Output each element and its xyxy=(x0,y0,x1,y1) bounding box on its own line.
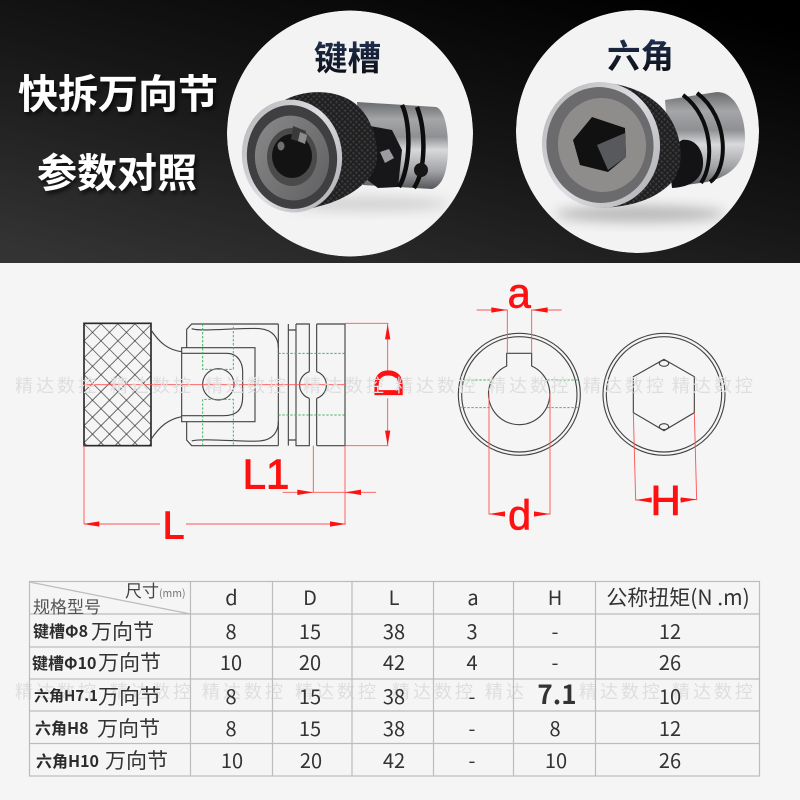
watermark row upper: 精达数控 xyxy=(303,372,387,398)
row: hex 10: - xyxy=(469,745,476,774)
watermark row upper: 精达数控 xyxy=(672,372,756,398)
table header: a xyxy=(467,582,479,611)
row: hex 8: 12 xyxy=(659,713,681,742)
row: hex 10: 10 xyxy=(221,745,243,774)
watermark row lower: 精达数控 xyxy=(15,678,99,704)
row: hex 8: - xyxy=(469,713,476,742)
yoke and body outlines xyxy=(151,324,345,446)
end view drawings xyxy=(458,270,725,538)
label L1: L1 xyxy=(243,450,289,497)
row: hex 7.1: 38 xyxy=(383,681,405,710)
table grid xyxy=(30,582,760,776)
subtitle: 参数对照 xyxy=(37,141,197,199)
label L: L xyxy=(163,504,185,548)
row: hex 8: 38 xyxy=(383,713,405,742)
dimension arrows xyxy=(83,324,390,527)
row: hex 10: 六角H10 xyxy=(36,748,99,772)
watermark row lower xyxy=(15,678,756,704)
watermark row upper: 精达数控 xyxy=(583,372,667,398)
row: keyway 10: 10 xyxy=(220,647,242,676)
watermark row upper: 精达数控 xyxy=(205,372,289,398)
red dimension lines xyxy=(84,323,388,524)
label d: d xyxy=(508,491,531,538)
keyway end view xyxy=(458,333,580,455)
parameter table xyxy=(30,577,760,776)
row: hex 10 xyxy=(36,745,681,775)
row: keyway 10: 42 xyxy=(383,647,405,676)
row: hex 7.1: 7.1 xyxy=(537,675,577,712)
row: keyway 8: 3 xyxy=(466,616,478,645)
dark header band xyxy=(0,0,800,263)
photo circle: keyway coupling xyxy=(227,10,473,256)
row: hex 10: 42 xyxy=(383,745,405,774)
knurled head xyxy=(84,323,151,446)
label a: a xyxy=(508,270,532,317)
red dimension lines xyxy=(477,310,697,514)
row: keyway 10: 4 xyxy=(466,647,478,676)
row: keyway 10: 26 xyxy=(659,647,681,676)
watermark row upper: 精达数控 xyxy=(488,372,572,398)
label: hex: 六角 xyxy=(607,29,674,78)
watermark row upper: 精达数控 xyxy=(110,372,194,398)
row: hex 10: 20 xyxy=(300,745,322,774)
row: hex 10: 26 xyxy=(659,745,681,774)
table header: d xyxy=(225,582,238,611)
title xyxy=(18,62,218,199)
side view drawing xyxy=(83,323,411,548)
row: hex 7.1: 15 xyxy=(299,681,321,710)
watermark row upper xyxy=(15,372,756,398)
row: keyway 8: 38 xyxy=(383,616,405,645)
title: 快拆万向节 xyxy=(18,62,218,120)
watermark row lower: 精达数控 xyxy=(579,678,663,704)
hidden green lines xyxy=(203,324,345,446)
row: hex 8: 8 xyxy=(549,713,561,742)
watermark row lower: 精达数控 xyxy=(295,678,379,704)
row: hex 10: 10 xyxy=(545,745,567,774)
table header xyxy=(33,577,750,618)
row: keyway 10 xyxy=(32,647,681,677)
row: keyway 8: 12 xyxy=(659,616,681,645)
table header: 尺寸 xyxy=(125,577,159,602)
row: hex 8 xyxy=(35,713,681,743)
watermark row lower: 精达数控 xyxy=(110,678,194,704)
table header: D xyxy=(303,582,317,611)
row: hex 8: 六角H8 xyxy=(35,715,89,739)
photo circle: hex coupling xyxy=(516,10,759,253)
row: hex 7.1: 万向节 xyxy=(98,681,161,711)
row: hex 8: 万向节 xyxy=(97,713,160,743)
table header: H xyxy=(548,582,562,611)
watermark row upper: 精达数控 xyxy=(15,372,99,398)
row: keyway 8: 万向节 xyxy=(91,616,154,646)
label H: H xyxy=(651,477,681,524)
row: hex 8: 8 xyxy=(225,713,237,742)
row: keyway 8: - xyxy=(552,616,559,645)
label D: D xyxy=(367,369,411,398)
row: keyway 8: 8 xyxy=(225,616,237,645)
row: hex 10: 万向节 xyxy=(105,745,168,775)
row: hex 7.1: 8 xyxy=(225,681,237,710)
watermark row lower: 精达 xyxy=(485,678,527,704)
row: hex 7.1: 六角H7.1 xyxy=(34,685,98,706)
row: keyway 10: 万向节 xyxy=(98,647,161,677)
row: hex 7.1 xyxy=(34,675,681,712)
table header: L xyxy=(389,582,400,611)
watermark row lower: 精达数控 xyxy=(672,678,756,704)
table header: 规格型号 xyxy=(33,593,101,618)
hidden green lines xyxy=(459,380,579,408)
table header: 公称扭矩(N .m) xyxy=(606,582,750,612)
table header: (mm) xyxy=(159,586,186,601)
label: keyway: 键槽 xyxy=(314,31,381,80)
row: keyway 8: 键槽Φ8 xyxy=(33,618,88,642)
watermark row lower: 精达数控 xyxy=(202,678,286,704)
dimension arrows xyxy=(489,307,697,517)
row: keyway 10: - xyxy=(552,647,559,676)
hex end view xyxy=(603,333,725,455)
watermark row lower: 精达数控 xyxy=(392,678,476,704)
row: keyway 8 xyxy=(33,616,681,646)
row: hex 8: 15 xyxy=(299,713,321,742)
row: hex 7.1: - xyxy=(469,681,476,710)
row: keyway 10: 20 xyxy=(299,647,321,676)
row: keyway 10: 键槽Φ10 xyxy=(32,650,96,674)
row: keyway 8: 15 xyxy=(299,616,321,645)
row: hex 7.1: 10 xyxy=(659,681,681,710)
watermark row upper: 精达数控 xyxy=(395,372,479,398)
